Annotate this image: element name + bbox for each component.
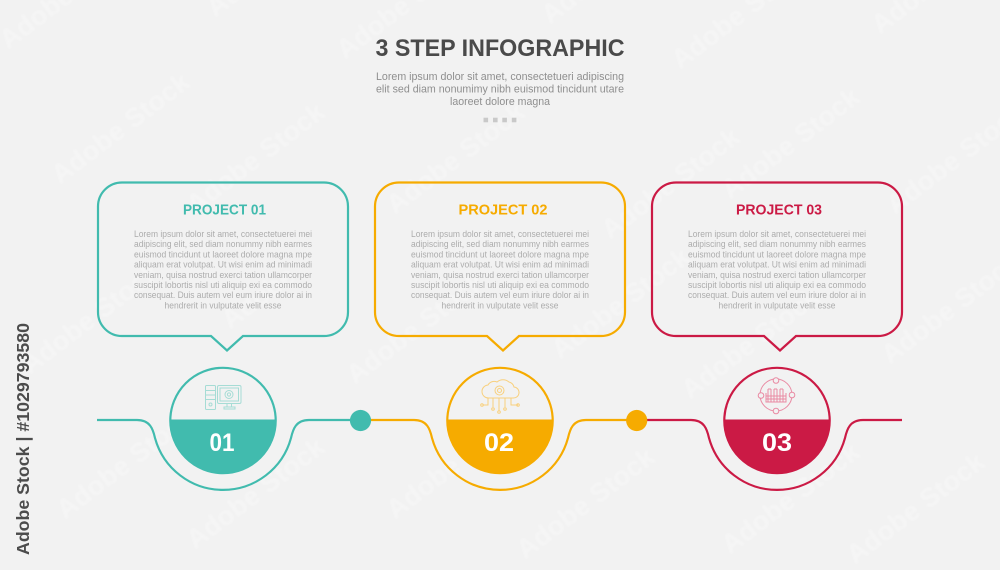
subtitle: Lorem ipsum dolor sit amet, consectetueri adipiscing — [376, 71, 624, 83]
circle outline 01 — [170, 368, 276, 473]
body text 01: euismod tincidunt ut laoreet dolore magna mpe — [134, 248, 312, 259]
four small dots divider — [484, 118, 516, 122]
body text 03 — [688, 228, 866, 310]
body text 02 — [411, 228, 589, 310]
panel: project 03 — [652, 182, 902, 350]
body text 01: aliquam erat volutpat. Ut wisi enim ad minimadi — [134, 259, 312, 270]
watermark pattern: Adobe Stock — [341, 266, 491, 390]
body text 01 — [134, 228, 312, 310]
watermark pattern: Adobe Stock — [181, 96, 331, 220]
watermark pattern: Adobe Stock — [716, 436, 866, 560]
watermark pattern: Adobe Stock — [716, 81, 866, 205]
watermark pattern: Adobe Stock — [16, 256, 166, 380]
half fill 01 — [170, 420, 276, 474]
timeline segment 02 — [360, 420, 637, 490]
body text 01: adipiscing elit, sed diam nonummy nibh earmes — [134, 238, 312, 249]
body text 03: Lorem ipsum dolor sit amet, consectetuerei mei — [688, 228, 866, 239]
connector dot 02 — [626, 410, 647, 431]
body text 03: adipiscing elit, sed diam nonummy nibh earmes — [688, 238, 866, 249]
body text 01: suscipit lobortis nisl uti aliquip exi ea commodo — [134, 279, 312, 290]
body text 02: hendrerit in vulputate velit esse — [442, 299, 558, 310]
watermark pattern: Adobe Stock — [841, 446, 991, 570]
step 01 circle — [170, 368, 276, 474]
body text 01: consequat. Duis autem vel eum iriure dolor ai in — [134, 289, 312, 300]
body text 02: consequat. Duis autem vel eum iriure dolor ai in — [411, 289, 589, 300]
half fill 02 — [447, 420, 553, 474]
watermark pattern: Adobe Stock — [511, 441, 661, 565]
watermark pattern: Adobe Stock — [381, 96, 531, 220]
step 03 circle — [724, 368, 830, 474]
body text 03: suscipit lobortis nisl uti aliquip exi ea commodo — [688, 279, 866, 290]
watermark pattern: Adobe Stock — [46, 66, 196, 190]
watermark pattern: Adobe Stock — [546, 241, 696, 365]
body text 02: adipiscing elit, sed diam nonummy nibh earmes — [411, 238, 589, 249]
body text 03: consequat. Duis autem vel eum iriure dolor ai in — [688, 289, 866, 300]
body text 02: Lorem ipsum dolor sit amet, consectetuerei mei — [411, 228, 589, 239]
number 01: 01 — [210, 429, 235, 457]
watermark pattern: Adobe Stock — [181, 431, 331, 555]
body text 02: euismod tincidunt ut laoreet dolore magna mpe — [411, 248, 589, 259]
number 03: 03 — [762, 429, 792, 457]
step 02 circle — [447, 368, 553, 474]
subtitle: laoreet dolore magna — [450, 96, 550, 108]
subtitle: elit sed diam nonumimy nibh euismod tincidunt utare — [376, 84, 624, 96]
subtitle — [376, 71, 624, 108]
number 02: 02 — [484, 429, 514, 457]
speech bubble outline 03 — [652, 182, 902, 350]
body text 01: veniam, quisa nostrud exerci tation ullamcorper — [134, 269, 312, 280]
icon: cloud with circuit — [481, 380, 519, 413]
watermark pattern: Adobe — [216, 260, 301, 335]
body text 03: hendrerit in vulputate velit esse — [718, 299, 836, 310]
body text 01: hendrerit in vulputate velit esse — [164, 299, 282, 310]
stock id vertical text: Adobe Stock | #1029793580 — [13, 323, 33, 555]
heading: project 03: PROJECT 03 — [736, 201, 822, 218]
panel: project 01 — [98, 182, 348, 350]
body text 02: veniam, quisa nostrud exerci tation ullamcorper — [411, 269, 589, 280]
body text 02: aliquam erat volutpat. Ut wisi enim ad minimadi — [411, 259, 589, 270]
body text 03: euismod tincidunt ut laoreet dolore magna mpe — [688, 248, 866, 259]
title: 3 STEP INFOGRAPHIC — [376, 35, 624, 62]
body text 02: suscipit lobortis nisl uti aliquip exi ea commodo — [411, 279, 589, 290]
speech bubble outline 01 — [98, 182, 348, 350]
timeline segment 03 — [637, 420, 902, 490]
circle outline 02 — [447, 368, 553, 473]
half fill 03 — [724, 420, 830, 474]
heading: project 02: PROJECT 02 — [458, 201, 548, 218]
connector dot 01 — [350, 410, 371, 431]
watermark pattern: Adobe Stock — [676, 281, 826, 405]
icon: computer with gear — [206, 386, 241, 410]
timeline segment 01 — [97, 420, 360, 490]
body text 03: veniam, quisa nostrud exerci tation ullamcorper — [688, 269, 866, 280]
body text 03: aliquam erat volutpat. Ut wisi enim ad minimadi — [688, 259, 866, 270]
watermark pattern: Adobe Stock — [596, 121, 746, 245]
watermark pattern: Adobe Stock — [381, 401, 531, 525]
body text 01: Lorem ipsum dolor sit amet, consectetuerei mei — [134, 228, 312, 239]
circle outline 03 — [724, 368, 830, 473]
heading: project 01: PROJECT 01 — [183, 201, 266, 218]
watermark pattern: Adobe Stock — [51, 401, 201, 525]
speech bubble outline 02 — [375, 182, 625, 350]
panel: project 02 — [375, 182, 625, 350]
icon: factory in orbit — [758, 378, 795, 414]
